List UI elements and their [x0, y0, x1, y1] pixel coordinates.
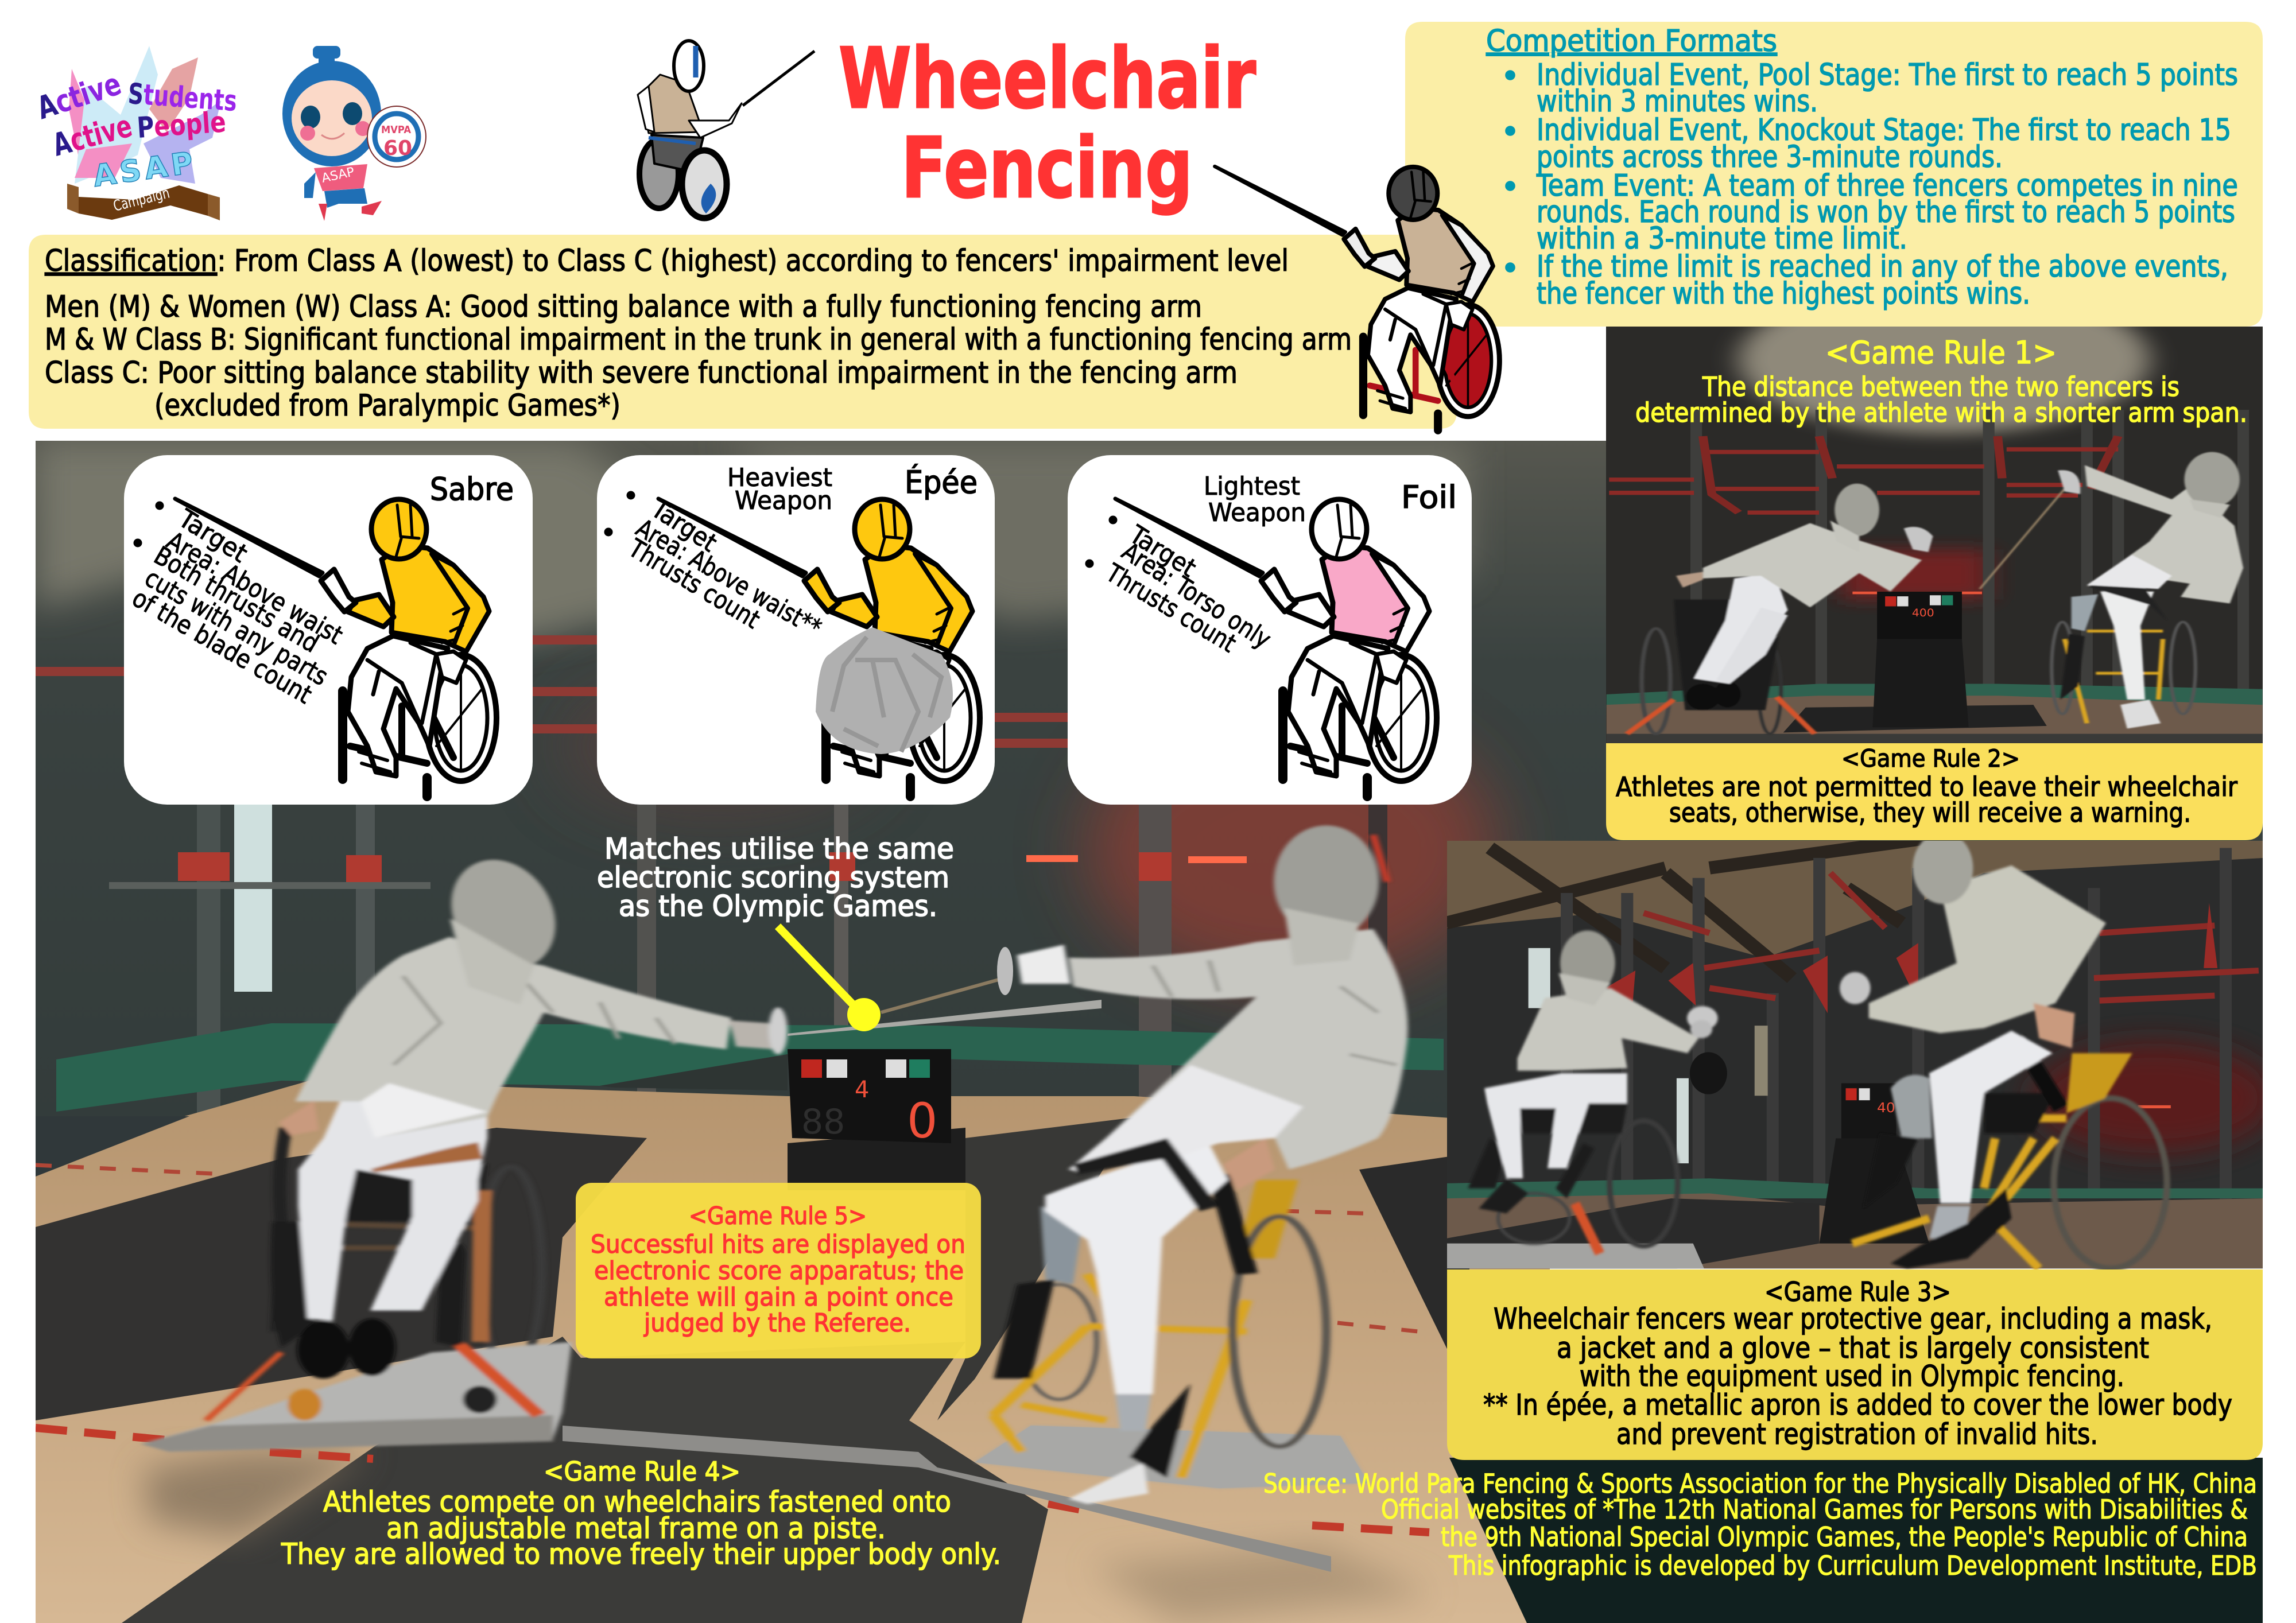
game rule 5 text: Successful hits are displayed on	[591, 1230, 965, 1259]
classification text: (excluded from Paralympic Games*)	[154, 389, 620, 423]
epee rules	[604, 491, 826, 643]
lightest weapon note	[1204, 472, 1306, 527]
game rule 1 text: determined by the athlete with a shorter arm span.	[1635, 397, 2247, 428]
game rule 2 text	[1616, 744, 2237, 828]
card: foil	[1068, 455, 1472, 805]
icon: metallic apron	[816, 627, 953, 754]
bullet list: points across three 3-minute rounds.	[1537, 140, 2003, 174]
sabre rules: cuts with any parts	[140, 563, 333, 692]
apron line work	[832, 637, 941, 752]
game rule 1 text	[1635, 335, 2247, 428]
logo: Active Students Active People ASAP campaign: Students	[127, 77, 238, 118]
photo floor: wood panels and dark mats	[36, 1023, 2263, 1623]
mascot: MVPA 60 character: ASAP	[320, 165, 356, 186]
game rule 4 text: an adjustable metal frame on a piste.	[386, 1512, 886, 1545]
lightest weapon note: Lightest	[1204, 472, 1300, 501]
sabre label: Sabre	[430, 471, 514, 507]
heaviest weapon note	[727, 463, 832, 515]
classification text: Men (M) & Women (W) Class A: Good sitting balance with a fully functioning fencing arm	[45, 290, 1202, 324]
game rule 4 text: They are allowed to move freely their upper body only.	[281, 1537, 1001, 1571]
game rule 3 text: and prevent registration of invalid hits.	[1616, 1418, 2098, 1451]
epee rules: Target	[646, 494, 722, 558]
panel: competition formats	[1405, 22, 2263, 327]
icon: large fencer beside title	[1215, 166, 1499, 430]
foil rules	[1085, 516, 1276, 658]
panel: game rule 5	[576, 1183, 981, 1358]
left fencer in wheelchair	[141, 856, 788, 1452]
bullet list: the fencer with the highest points wins.	[1537, 277, 2030, 311]
game rule 3 text: with the equipment used in Olympic fencing.	[1580, 1360, 2124, 1393]
sabre rules: Area: Above waist	[162, 526, 348, 650]
metal frame on piste	[563, 1426, 1368, 1572]
heaviest weapon note: Weapon	[735, 486, 832, 515]
title: Wheelchair	[839, 30, 1256, 127]
mascot: MVPA 60 character	[282, 46, 426, 221]
card: sabre	[124, 455, 533, 805]
foil rules: Thrusts count	[1100, 558, 1241, 658]
callout text: Matches utilise the same	[604, 832, 954, 865]
scoreboard: 4	[855, 1077, 869, 1103]
bullet list: within 3 minutes wins.	[1537, 84, 1818, 119]
lightest weapon note: Weapon	[1208, 498, 1306, 527]
white block behind upper right	[1378, 327, 1606, 441]
game rule 5 text: <Game Rule 5>	[689, 1202, 867, 1230]
logo: Active Students Active People ASAP campaign	[33, 46, 238, 220]
rule 3 right fencer	[1840, 832, 2167, 1268]
callout: electronic scoring system	[597, 832, 954, 1031]
callout text: electronic scoring system	[597, 861, 949, 894]
game rule 5 text: judged by the Referee.	[643, 1309, 911, 1338]
game rule 2 text: <Game Rule 2>	[1841, 744, 2020, 772]
panel: classification	[29, 235, 1457, 429]
foil label: Foil	[1401, 479, 1457, 515]
mascot: MVPA 60 character: 60	[383, 137, 412, 160]
icon: foil fencer	[1115, 499, 1437, 797]
photo: Game Rule 3 scene	[1446, 832, 2275, 1268]
icon: epee fencer	[658, 499, 980, 797]
game rule 4 text: <Game Rule 4>	[544, 1456, 740, 1487]
main photo: two wheelchair fencers on a piste	[36, 441, 2263, 1623]
heading: competition formats: Competition Formats	[1486, 24, 1777, 59]
epee rules: Area: Above waist**	[631, 513, 826, 643]
classification text	[45, 244, 1352, 423]
game rule 3 text: <Game Rule 3>	[1764, 1276, 1951, 1307]
scoreboard: 0	[907, 1093, 937, 1149]
game rule 3 text	[1483, 1276, 2232, 1451]
bullet list: within a 3-minute time limit.	[1537, 222, 1907, 256]
game rule 5 text: electronic score apparatus; the	[594, 1256, 964, 1286]
title	[839, 30, 1256, 217]
classification text: Class C: Poor sitting balance stability with severe functional impairment in the fencing arm	[45, 356, 1238, 390]
rule 1 left fencer	[1627, 484, 1933, 734]
game rule 1 text: <Game Rule 1>	[1825, 335, 2057, 371]
game rule 1 text: The distance between the two fencers is	[1702, 371, 2179, 402]
photo: Game Rule 1 scene	[1605, 286, 2266, 744]
sabre rules: of the blade count	[127, 583, 317, 710]
callout text: as the Olympic Games.	[619, 890, 937, 923]
game rule 4 text: Athletes compete on wheelchairs fastened onto	[323, 1485, 951, 1519]
game rule 5 text	[591, 1202, 965, 1338]
game rule 5 text: athlete will gain a point once	[604, 1283, 953, 1312]
callout text	[597, 832, 954, 923]
rule 3 photo backdrop: 40	[1877, 1100, 1895, 1116]
rule 1 scoreboard	[1872, 592, 1969, 727]
scoreboard	[788, 1049, 965, 1185]
game rule 2 text: seats, otherwise, they will receive a warning.	[1669, 797, 2191, 828]
classification text: Classification: From Class A (lowest) to Class C (highest) according to fencers' impairment level	[45, 244, 1289, 278]
blades crossing	[788, 947, 1102, 1036]
rule 3 left fencer	[1468, 930, 1718, 1253]
icon: small fencer in wheelchair	[638, 41, 815, 218]
rule 1 photo backdrop	[1605, 286, 2266, 744]
logo: Active Students Active People ASAP campaign: Active	[33, 65, 126, 126]
game rule 3 text: a jacket and a glove – that is largely consistent	[1557, 1331, 2149, 1365]
sabre rules: Both thrusts and	[149, 541, 324, 659]
heaviest weapon note: Heaviest	[727, 463, 832, 492]
logo: Active Students Active People ASAP campaign: ASAP	[91, 146, 195, 194]
source credits	[1263, 1468, 2257, 1581]
logo: Active Students Active People ASAP campaign: People	[136, 105, 227, 145]
foil rules: Area: Torso only	[1116, 537, 1276, 654]
panel: game rule 2	[1606, 743, 2263, 840]
epee rules: Thrusts count	[623, 533, 765, 635]
photo backdrop: gym wall and ceiling	[36, 441, 2263, 1187]
scoreboard: 88	[801, 1102, 845, 1142]
bullet list	[1506, 58, 2238, 311]
epee label: Épée	[905, 464, 978, 500]
card: epee	[597, 455, 995, 805]
rule 1 scoreboard: 400	[1912, 607, 1934, 619]
sabre rules: Target	[173, 503, 253, 569]
sabre rules	[127, 502, 348, 710]
mascot: MVPA 60 character: MVPA	[381, 124, 411, 136]
panel: game rule 3	[1447, 1269, 2263, 1460]
callout pointer	[778, 926, 881, 1031]
right fencer in wheelchair	[975, 825, 1407, 1504]
icon: sabre fencer	[175, 499, 497, 797]
logo: Active Students Active People ASAP campaign: Campaign	[111, 184, 172, 215]
classification text: M & W Class B: Significant functional impairment in the trunk in general with a functioning fencing arm	[45, 323, 1352, 357]
logo: Active Students Active People ASAP campaign: Active	[49, 107, 136, 164]
game rule 4 text	[281, 1456, 1001, 1571]
rule 1 right fencer	[1980, 452, 2243, 728]
rule 3 photo backdrop	[1446, 838, 2275, 1268]
foil rules: Target	[1124, 519, 1201, 583]
game rule 2 text: Athletes are not permitted to leave their wheelchair	[1616, 771, 2237, 802]
title: Fencing	[901, 120, 1193, 217]
